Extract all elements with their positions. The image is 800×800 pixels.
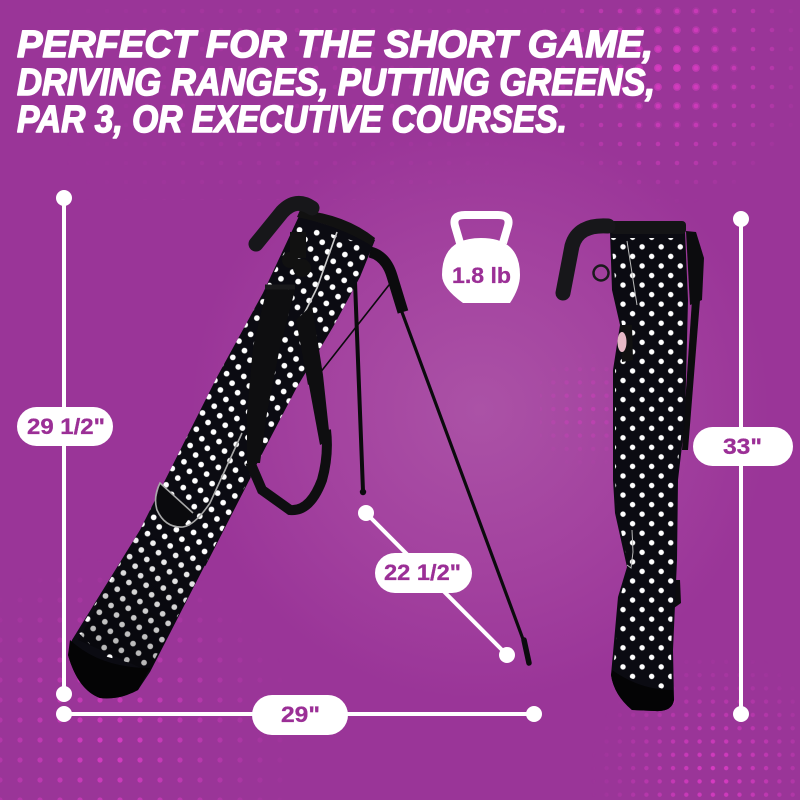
- pocket: [155, 483, 193, 527]
- piping: [156, 433, 242, 527]
- d ring: [594, 266, 608, 280]
- bag body: [610, 232, 688, 711]
- lower shading: [78, 530, 205, 672]
- logo badge: [618, 332, 626, 352]
- bag body: [68, 216, 375, 698]
- shoulder strap: [247, 287, 330, 510]
- handle: [563, 226, 608, 293]
- dimension: 22 1/2 inch leg: 22 1/2": [384, 560, 461, 585]
- dimension: 22 1/2 inch leg: [358, 505, 515, 663]
- title: PERFECT FOR THE SHORT GAME,: [17, 24, 653, 66]
- stand leg: [674, 231, 704, 608]
- polka dots: [78, 224, 370, 668]
- clips: [282, 232, 311, 277]
- right bag: front view: [563, 221, 704, 711]
- title: PAR 3, OR EXECUTIVE COURSES.: [17, 99, 567, 141]
- bottom cap: [611, 670, 674, 711]
- dimension: 33 inch height: 33": [723, 434, 762, 459]
- side patch: [620, 325, 633, 362]
- top collar: [297, 210, 375, 246]
- icon: kettlebell weight: 1.8 lb: [452, 263, 511, 288]
- dimension: 29 1/2 inch height: 29 1/2": [27, 414, 105, 439]
- dimension: 29 inch width: 29": [281, 702, 320, 727]
- stand legs: [205, 252, 529, 663]
- handle: [256, 203, 312, 244]
- top collar: [610, 221, 686, 234]
- dimension: 29 inch width: [56, 695, 542, 735]
- piping: [627, 241, 637, 568]
- title: DRIVING RANGES, PUTTING GREENS,: [17, 62, 655, 104]
- dimension: 33 inch height: [693, 211, 793, 722]
- title: [17, 24, 655, 141]
- bottom cap: [68, 640, 150, 698]
- dimension: 29 1/2 inch height: [17, 190, 113, 702]
- polka dots: [611, 238, 686, 692]
- icon: kettlebell weight: [442, 215, 520, 303]
- left bag: side view on stand: [68, 203, 529, 698]
